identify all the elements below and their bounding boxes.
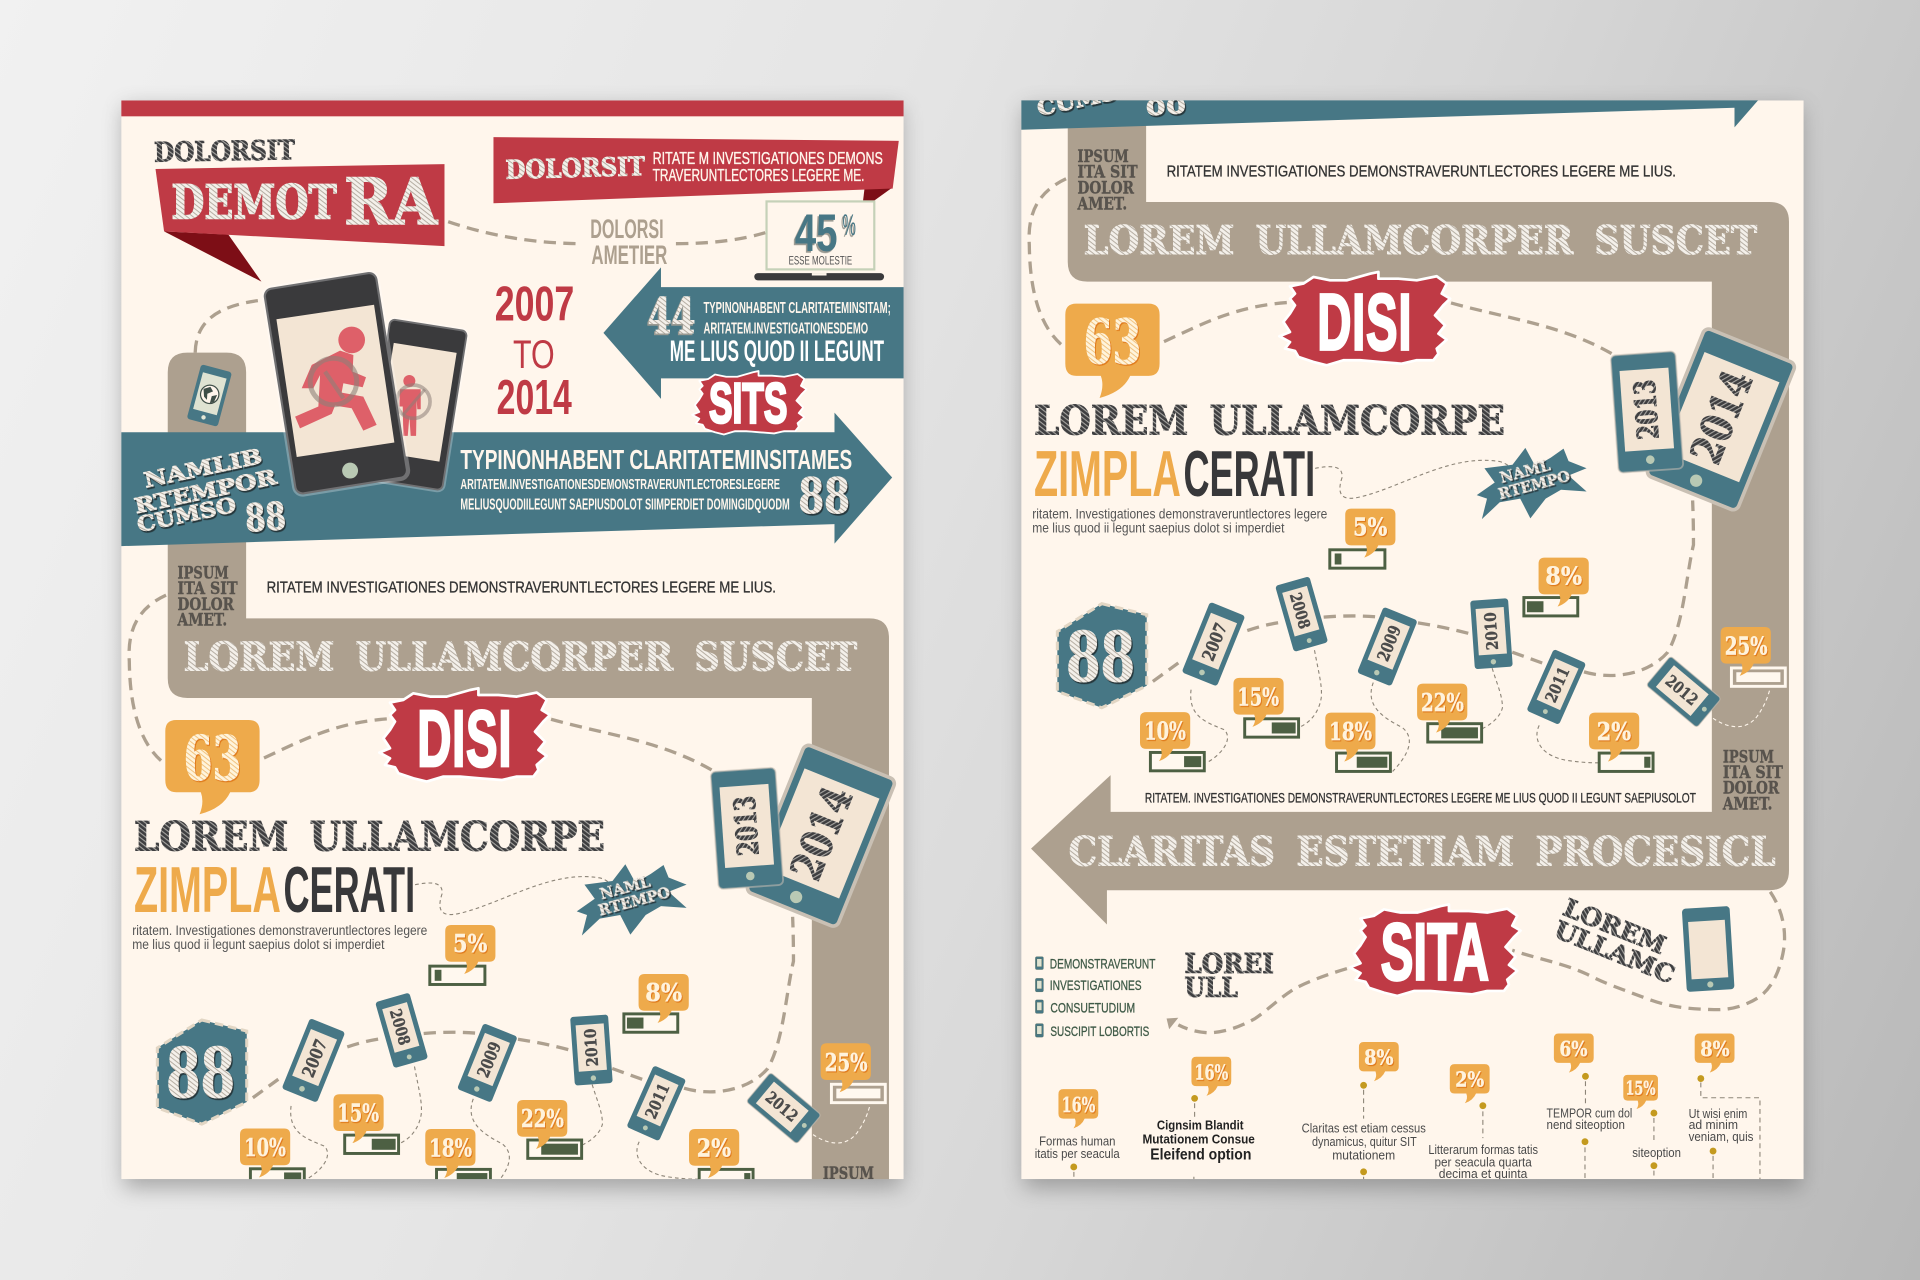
title banner: demotra: RA — [344, 165, 439, 240]
stat: 18% — [1325, 713, 1390, 771]
stat: 2%: 2% — [1455, 1067, 1484, 1092]
caption: ut wisi — [1689, 1106, 1753, 1144]
hexagon badge 88 — [1057, 604, 1147, 708]
heading: lorem ullamcorper suscet: LOREM ULLAMCORPER SUSCET — [184, 634, 857, 680]
stat: 8% right: 8% — [1700, 1036, 1730, 1061]
callout: 63 — [165, 720, 260, 814]
caption: ut wisi: veniam, quis — [1689, 1129, 1753, 1144]
tab text: ipsum ita sit: ITA SIT — [1078, 162, 1138, 182]
top red band — [121, 100, 904, 116]
phone: 2007 — [282, 1018, 345, 1103]
phone: 2014: 2014 — [781, 780, 864, 887]
left-pointing teal arrow — [603, 267, 904, 399]
stat: 2%: 2% — [1597, 717, 1631, 746]
tab text: ipsum ita sit: ITA SIT — [178, 578, 238, 598]
stat: 2%: 2% — [697, 1134, 731, 1163]
paragraph: me lius quod ii legunt saepius dolot si imperdiet — [132, 937, 385, 952]
legend item: demonstraverunt: DEMONSTRAVERUNT — [1050, 955, 1156, 971]
burst label: naml rtempo: NAML — [598, 873, 652, 903]
band text: ARITATEM.INVESTIGATIONESDEMONSTRAVERUNTLECTORESLEGERE — [460, 477, 780, 493]
timeline section — [1057, 500, 1785, 771]
stat: 22% — [517, 1100, 582, 1158]
tab text: ipsum ita sit — [177, 566, 238, 626]
stat: 2% — [1589, 713, 1653, 771]
phone: 2012: 2012 — [762, 1088, 802, 1126]
stat: 8%: 8% — [1545, 562, 1582, 591]
heading: zimplacerati — [135, 866, 413, 912]
stat: 8% — [624, 974, 689, 1032]
splat label: disi — [379, 688, 550, 783]
stat: 10%: 10% — [244, 1133, 286, 1162]
column text: ipsum: IPSUM — [823, 1163, 874, 1183]
stat: 22%: 22% — [1421, 688, 1464, 717]
caption: claritas est: mutationem — [1332, 1148, 1395, 1163]
panel: right poster — [1021, 0, 1804, 1181]
stat: 8% — [1359, 1042, 1399, 1081]
paragraph: me lius quod ii legunt saepius dolot si imperdiet — [1032, 521, 1285, 536]
stat: 6% — [1554, 1033, 1594, 1073]
column text: ipsum ita sit — [1722, 746, 1783, 813]
bottom stems — [1074, 1081, 1760, 1179]
caption: tempor: TEMPOR cum dol — [1547, 1105, 1632, 1120]
stat: 15%: 15% — [337, 1099, 379, 1128]
phone: 2008 — [1275, 576, 1328, 652]
small phone with person — [376, 318, 468, 492]
legend item: investigationes: INVESTIGATIONES — [1050, 977, 1142, 993]
stat: 22%: 22% — [521, 1104, 564, 1133]
years 2007 to 2014 — [496, 286, 573, 414]
stat: 15% — [1623, 1075, 1658, 1109]
legend item: suscipit lobortis: SUSCIPIT LOBORTIS — [1050, 1023, 1149, 1039]
heading: dolorsit: DOLORSIT — [154, 135, 295, 169]
splat label: sits: SITS — [709, 371, 787, 434]
band label: namlib rtempor cumso 88: CUMSO — [135, 492, 238, 537]
callout: 63: 63 — [184, 723, 241, 794]
icon: laptop 45 percent — [754, 201, 884, 280]
callout: 63 — [1065, 304, 1160, 398]
stat: 5% — [430, 925, 495, 984]
heading: zimplacerati: ZIMPLA — [134, 853, 281, 926]
band label remainder: cumso 88: CUMSO — [1035, 75, 1138, 121]
hexagon badge 88: 88 — [166, 1034, 235, 1114]
stat: 10% — [240, 1128, 304, 1187]
arrowhead — [1167, 1018, 1178, 1029]
phone: 2013 — [1610, 351, 1683, 473]
tab text: ipsum ita sit: DOLOR — [178, 594, 234, 614]
phone: 2009: 2009 — [1373, 622, 1405, 664]
band label: namlib rtempor cumso 88: NAMLIB — [142, 443, 264, 492]
stat: 25% — [821, 1043, 885, 1103]
bottom dots — [1070, 1073, 1716, 1175]
title banner: demotra: DEMOT — [171, 175, 337, 230]
burst label: naml rtempo: RTEMPO — [1497, 468, 1572, 503]
heading: lorei ull: LOREI — [1184, 949, 1274, 980]
paragraph — [132, 923, 427, 952]
heading: claritas estetiam procesicl: CLARITAS ESTETIAM PROCESICL — [1069, 828, 1776, 876]
heading: zimplacerati: ZIMPLA — [1034, 437, 1181, 510]
timeline dashes — [1153, 500, 1693, 681]
stat: 5%: 5% — [453, 929, 487, 958]
icon: laptop 45 percent: % — [842, 209, 856, 242]
label: dolorsi ametier: AMETIER — [591, 240, 667, 270]
burst label: naml rtempo: RTEMPO — [597, 884, 672, 919]
phone: 2010: 2010 — [580, 1028, 602, 1067]
caption: cignsim blandit: Mutationem Consue — [1142, 1131, 1255, 1146]
stat: 15%: 15% — [1237, 682, 1279, 711]
dashed connector: tab to bubble — [129, 595, 166, 763]
stat: 2% — [689, 1129, 753, 1188]
phone: 2009: 2009 — [473, 1039, 505, 1080]
phone: 2011 — [1526, 649, 1586, 725]
paragraph: ritatem. Investigationes demonstraveruntlectores legere — [132, 923, 427, 938]
stat: 8% right — [1695, 1033, 1735, 1073]
caption: claritas est — [1302, 1121, 1426, 1163]
icon: laptop 45 percent: 45 — [795, 204, 838, 263]
years 2007 to 2014: 2007 — [495, 277, 574, 331]
tab text: ipsum ita sit: AMET. — [177, 610, 227, 630]
caption: formas human: itatis per seacula — [1035, 1146, 1120, 1161]
caption: cignsim blandit — [1142, 1118, 1255, 1164]
thin connectors: phones to bars — [291, 1067, 698, 1188]
brown route bar — [168, 353, 889, 1224]
band label remainder: cumso 88: 88 — [1144, 77, 1187, 124]
panel: left poster — [121, 100, 904, 1224]
splat label: disi — [1279, 272, 1450, 367]
banner: dolorsit statement: TRAVERUNTLECTORES LEGERE ME. — [653, 165, 864, 185]
heading: lorem ullamcorper suscet: LOREM ULLAMCORPER SUSCET — [1084, 218, 1757, 264]
splat label: sita — [1350, 904, 1521, 998]
dashed loop to sita — [1512, 892, 1785, 1010]
label: lorem ullamc: ULLAMC — [1550, 915, 1679, 989]
caption: ut wisi: Ut wisi enim — [1689, 1106, 1747, 1121]
banner: dolorsit statement — [493, 137, 899, 209]
years 2007 to 2014: TO — [513, 333, 555, 377]
column text: ipsum ita sit: AMET. — [1722, 793, 1772, 813]
phone: 2008 — [375, 993, 428, 1068]
stat: 8%: 8% — [1364, 1045, 1394, 1070]
label: dolorsi ametier — [591, 219, 667, 264]
label: dolorsi ametier: DOLORSI — [590, 214, 664, 244]
dashed connectors: disi — [264, 719, 712, 770]
teal band arrow — [121, 413, 892, 546]
phone: 2011 — [626, 1065, 686, 1141]
phone: 2008: 2008 — [386, 1007, 414, 1047]
dashed connector: title to label — [448, 222, 578, 244]
bottom stats — [1058, 1033, 1735, 1128]
stat: 25%: 25% — [1725, 631, 1768, 660]
thin connector to burst — [415, 877, 612, 915]
caption: litterarum: Litterarum formas tatis — [1428, 1142, 1538, 1157]
heading: lorem ullamcorpe: LOREM ULLAMCORPE — [1034, 396, 1505, 444]
big phone with runner — [262, 271, 409, 496]
phone: 2012 — [746, 1072, 821, 1144]
phone: 2014: 2014 — [1681, 364, 1764, 471]
caption: litterarum: per seacula quarta — [1434, 1154, 1533, 1169]
banner: dolorsit statement: DOLORSIT — [505, 152, 645, 186]
caption: litterarum: decima et quinta — [1439, 1166, 1528, 1181]
tab text: ipsum ita sit: IPSUM — [1078, 146, 1129, 166]
phone: 2010: 2010 — [1480, 612, 1502, 651]
caption: litterarum — [1428, 1142, 1538, 1181]
stat: 18% — [425, 1129, 490, 1188]
stat: 10%: 10% — [1144, 717, 1186, 746]
timeline dashes — [253, 917, 793, 1098]
splat label: disi: DISI — [1317, 278, 1412, 367]
phone: 2009 — [1357, 607, 1418, 686]
stat: 16% left: 16% — [1062, 1092, 1095, 1117]
tab text: ipsum ita sit — [1077, 146, 1138, 213]
sentence above arrow: RITATEM. INVESTIGATIONES DEMONSTRAVERUNTLECTORES LEGERE ME LIUS QUOD II LEGUNT SAEPIUSOLOT — [1145, 790, 1696, 806]
left-pointing teal arrow: 44 — [648, 287, 696, 345]
caption: claritas est: dynamicus, quitur SIT — [1312, 1134, 1417, 1149]
stat: 16%: 16% — [1194, 1059, 1228, 1084]
band label: namlib rtempor cumso 88: 88 — [244, 493, 287, 541]
column text: ipsum ita sit: ITA SIT — [1723, 762, 1783, 782]
icon: laptop 45 percent: ESSE MOLESTIE — [789, 253, 852, 267]
band label: namlib rtempor cumso 88: RTEMPOR — [132, 464, 279, 518]
stat: 16% left — [1058, 1089, 1098, 1128]
stat: 15%: 15% — [1626, 1079, 1656, 1100]
stat: 8% — [1524, 558, 1589, 616]
caption: ut wisi: ad minim — [1689, 1117, 1738, 1132]
phone: 2012: 2012 — [1662, 671, 1702, 709]
band text — [460, 444, 852, 513]
heading: zimplacerati: CERATI — [283, 853, 415, 926]
left-pointing teal arrow: ME LIUS QUOD II LEGUNT — [670, 335, 884, 368]
phone: 2013: 2013 — [1627, 379, 1666, 441]
dashed connector: phone to tab — [195, 301, 258, 353]
panel shadows — [124, 108, 1801, 1188]
years 2007 to 2014: 2014 — [497, 371, 572, 425]
splat label: sita: SITA — [1381, 908, 1489, 998]
caption: cignsim blandit: Eleifend option — [1150, 1147, 1251, 1164]
phone: 2014 — [1646, 327, 1796, 512]
band label: namlib rtempor cumso 88 — [134, 448, 286, 534]
stat: 6%: 6% — [1559, 1036, 1588, 1061]
splat label: disi: DISI — [417, 694, 512, 783]
caption: formas human — [1035, 1134, 1120, 1161]
dashed arrow path from sita — [1178, 969, 1347, 1033]
banner: dolorsit statement: RITATE M INVESTIGATIONES DEMONS — [653, 148, 883, 168]
phone: 2010 — [1470, 598, 1513, 669]
phone: 2007 — [1182, 602, 1245, 686]
intro sentence: RITATEM INVESTIGATIONES DEMONSTRAVERUNTLECTORES LEGERE ME LIUS. — [1167, 163, 1676, 180]
thin connectors: phones to bars — [1191, 650, 1598, 771]
band text: MELIUSQUODIILEGUNT SAEPIUSDOLOT SIIMPERDIET DOMINGIDQUODM — [460, 496, 790, 513]
stat: 22% — [1417, 684, 1482, 742]
caption: tempor — [1547, 1105, 1632, 1132]
caption: claritas est: Claritas est etiam cessus — [1302, 1121, 1426, 1136]
phone: 2013: 2013 — [727, 795, 766, 857]
dashed connector: tab to bubble — [1029, 179, 1066, 347]
heading: zimplacerati: CERATI — [1183, 437, 1315, 510]
phone: 2014 — [746, 744, 896, 928]
dashed connector: label to laptop — [676, 233, 765, 244]
tab text: ipsum ita sit: IPSUM — [178, 562, 229, 582]
tab text: ipsum ita sit: DOLOR — [1078, 177, 1134, 197]
legend — [1035, 955, 1156, 1039]
stat: 10% — [1140, 712, 1204, 771]
burst label: naml rtempo — [1477, 448, 1587, 519]
phone: 2013 — [710, 767, 783, 889]
phone: 2008: 2008 — [1286, 590, 1314, 631]
brown route bar with arrow — [1031, 86, 1789, 924]
phone: 2007: 2007 — [299, 1037, 332, 1080]
callout: 63: 63 — [1084, 307, 1141, 378]
phone: 2007: 2007 — [1199, 620, 1232, 664]
stat: 25% — [1721, 627, 1785, 686]
stat: 18%: 18% — [1329, 717, 1372, 746]
column text: ipsum ita sit: IPSUM — [1723, 746, 1774, 766]
stat: 15% — [333, 1094, 399, 1153]
phone: 2009 — [457, 1023, 518, 1103]
splat label: sits — [692, 371, 807, 435]
caption: formas human: Formas human — [1039, 1134, 1116, 1149]
hexagon badge 88: 88 — [1066, 618, 1135, 698]
phone: 2012 — [1646, 656, 1721, 728]
icon: phone — [1682, 906, 1735, 992]
band number 88: 88 — [798, 467, 850, 525]
tab text: ipsum ita sit: AMET. — [1077, 193, 1127, 213]
thin connector to burst — [1315, 460, 1512, 498]
phone: 2011: 2011 — [1541, 664, 1573, 705]
column text: ipsum ita sit: DOLOR — [1723, 777, 1779, 797]
title banner: demotra — [156, 164, 444, 282]
heading: lorei ull: ULL — [1184, 973, 1238, 1004]
caption: tempor: nend siteoption — [1547, 1117, 1625, 1132]
band label remainder: cumso 88 — [1035, 75, 1187, 124]
stat: 16% — [1191, 1057, 1231, 1096]
stat: 5%: 5% — [1353, 513, 1387, 542]
caption: siteoption: siteoption — [1632, 1145, 1681, 1160]
band text: TYPINONHABENT CLARITATEMINSITAMES — [460, 444, 852, 475]
icon: runner — [295, 327, 377, 431]
stat: 25%: 25% — [825, 1048, 868, 1077]
phone: 2010 — [570, 1014, 613, 1086]
top band continuation — [1021, 0, 1792, 130]
hexagon badge 88 — [157, 1020, 247, 1124]
left-pointing teal arrow: ARITATEM.INVESTIGATIONESDEMO — [703, 321, 868, 338]
stat: 2% — [1450, 1064, 1490, 1103]
paragraph — [1032, 507, 1327, 536]
icon: globe phone — [187, 364, 232, 427]
heading: lorei ull — [1184, 949, 1274, 1004]
paragraph: ritatem. Investigationes demonstraveruntlectores legere — [1032, 507, 1327, 522]
stat: 5% — [1330, 509, 1395, 568]
dashed connectors: disi — [1164, 302, 1612, 354]
label: lorem ullamc: LOREM — [1559, 893, 1670, 960]
phone: 2011: 2011 — [641, 1080, 673, 1122]
heading: lorem ullamcorpe: LOREM ULLAMCORPE — [134, 813, 605, 861]
left-pointing teal arrow: TYPINONHABENT CLARITATEMINSITAM; — [703, 300, 891, 317]
burst label: naml rtempo: NAML — [1498, 457, 1552, 487]
caption: cignsim blandit: Cignsim Blandit — [1157, 1118, 1244, 1133]
stat: 18%: 18% — [429, 1134, 472, 1163]
intro sentence: RITATEM INVESTIGATIONES DEMONSTRAVERUNTLECTORES LEGERE ME LIUS. — [267, 580, 776, 597]
stat: 8%: 8% — [645, 978, 682, 1007]
burst label: naml rtempo — [577, 864, 687, 936]
legend item: consuetudium: CONSUETUDIUM — [1050, 1000, 1135, 1016]
stat: 15% — [1233, 678, 1299, 737]
